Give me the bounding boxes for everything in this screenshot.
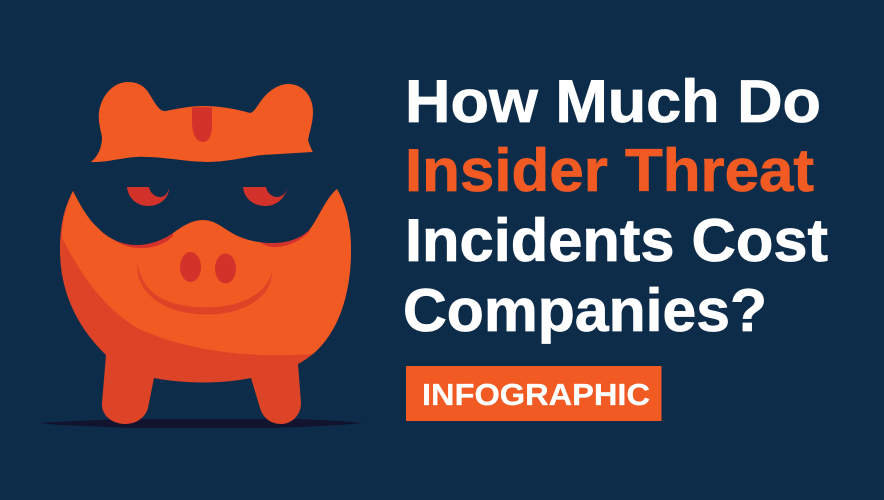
title: Companies? [403, 277, 767, 344]
left eye [127, 187, 169, 206]
right eye [243, 187, 287, 206]
snout nostril right [215, 254, 236, 284]
piggy head with ears [91, 82, 318, 162]
piggy body highlight [62, 170, 351, 355]
bandit mask [60, 150, 345, 245]
bandit mask red underside [88, 205, 312, 248]
icon: masked piggy bank [38, 82, 363, 428]
title: Insider Threat [405, 137, 814, 204]
forehead slot [192, 107, 212, 142]
snout nostril left [180, 252, 201, 282]
smile [137, 263, 272, 314]
title [403, 68, 828, 344]
infographic badge: INFOGRAPHIC [422, 378, 650, 412]
title: How Much Do [405, 68, 821, 135]
piggy body and legs [60, 170, 351, 424]
title: Incidents Cost [405, 207, 828, 274]
infographic badge [406, 366, 662, 421]
piggy ground shadow [38, 419, 363, 428]
